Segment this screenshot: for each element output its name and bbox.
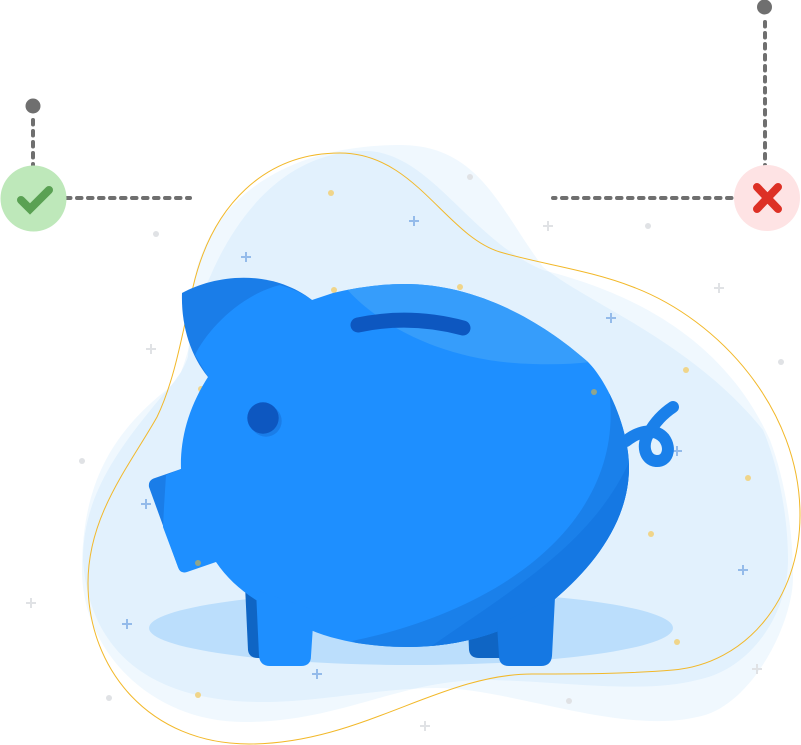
pig <box>149 278 700 680</box>
body top highlight <box>345 280 590 364</box>
connector: cons <box>553 0 772 198</box>
tail <box>626 407 673 461</box>
front leg left <box>256 590 314 666</box>
background blob: upper-left layer <box>82 145 788 722</box>
icon: red cross <box>734 165 800 231</box>
icon: green check <box>0 166 66 232</box>
dots over pig <box>195 389 597 566</box>
back leg left <box>245 585 270 658</box>
coin slot <box>358 320 463 328</box>
blue plus marks <box>122 216 748 679</box>
snout back <box>149 469 190 572</box>
body side shade <box>352 393 629 647</box>
front leg right <box>497 597 555 666</box>
gold dot at body top <box>457 284 463 290</box>
body <box>163 284 629 647</box>
ground shadow <box>149 591 673 665</box>
grey plus marks <box>26 221 762 731</box>
background blob: lower-right layer <box>83 151 793 721</box>
eye <box>247 402 282 437</box>
connector: pros <box>26 98 190 198</box>
gold dots <box>195 190 751 698</box>
body lower shade <box>432 463 629 646</box>
ear back <box>182 278 312 377</box>
speckle dots <box>79 174 784 704</box>
yellow outline blob <box>88 153 800 744</box>
back leg right <box>468 620 510 658</box>
